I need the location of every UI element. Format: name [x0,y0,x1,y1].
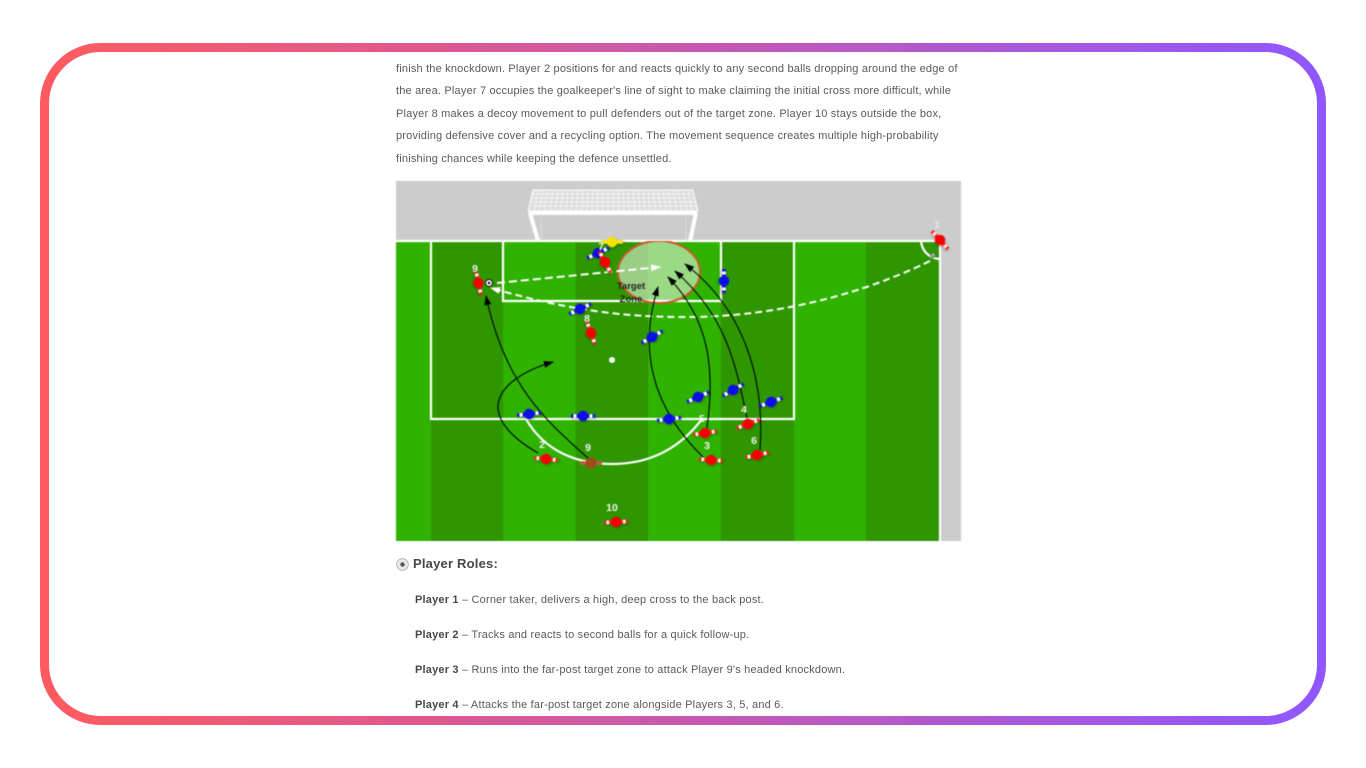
pitch markings [396,241,940,541]
intro text block [396,62,958,164]
target zone [617,241,700,305]
attackers with numbers [471,219,952,528]
defenders [517,243,784,426]
ball [486,280,492,286]
target zone: Zone [620,294,642,305]
goal net and posts [528,190,698,241]
role: player 4: Player 4 – Attacks the far-post target zone alongside Players 3, 5, and 6. [415,699,784,711]
intro text block: providing defensive cover and a recycling option. The movement sequence creates multiple high-probability [396,130,939,142]
player 8 [582,313,600,346]
role: player 3: Player 3 – Runs into the far-post target zone to attack Player 9's headed knockdown. [415,664,845,676]
corner ball [930,252,936,258]
player runs [486,264,761,459]
player 4 [735,404,761,433]
player 7: 7 [598,241,604,253]
role: player 1: Player 1 – Corner taker, delivers a high, deep cross to the back post. [415,594,764,606]
pitch surround [396,181,961,541]
penalty spot [609,357,615,363]
player 3: 3 [704,440,710,452]
player 9 faded run origin: 9 [585,442,591,454]
icon: soccer ball [396,558,409,571]
dashed cross from corner [491,261,930,317]
grass stripes [396,241,939,541]
target zone: Target [617,281,646,292]
player 5: 5 [699,413,705,425]
heading: player roles: Player Roles: [413,556,498,571]
player 2 [534,439,558,465]
player 7 [595,241,615,275]
player 1 [928,219,952,252]
intro text block: finish the knockdown. Player 2 positions for and reacts quickly to any second balls dropping around the edge of [396,62,958,74]
player 4: 4 [741,404,747,416]
player 3 [699,440,723,466]
player 10: 10 [606,502,618,514]
player roles section [396,556,845,711]
player 6 [744,435,770,463]
intro text block: finishing chances while keeping the defence unsettled. [396,152,672,164]
dashed pass: knockdown [497,267,660,283]
player 6: 6 [751,435,757,447]
player 10 [604,502,628,528]
player 9 faded run origin [580,442,602,468]
player 9 start position [471,263,486,296]
player 1: 1 [934,219,940,231]
intro text block: Player 8 makes a decoy movement to pull defenders out of the target zone. Player 10 stays outside the box, [396,108,941,120]
tactical pitch diagram [395,180,962,542]
role: player 2: Player 2 – Tracks and reacts to second balls for a quick follow-up. [415,629,749,641]
player 8: 8 [584,313,590,325]
player 2: 2 [539,439,545,451]
player 9 start position: 9 [472,263,478,275]
intro text block: the area. Player 7 occupies the goalkeeper's line of sight to make claiming the initial cross more difficult, while [396,84,951,96]
goalkeeper [601,237,623,247]
player 5 [692,413,718,440]
